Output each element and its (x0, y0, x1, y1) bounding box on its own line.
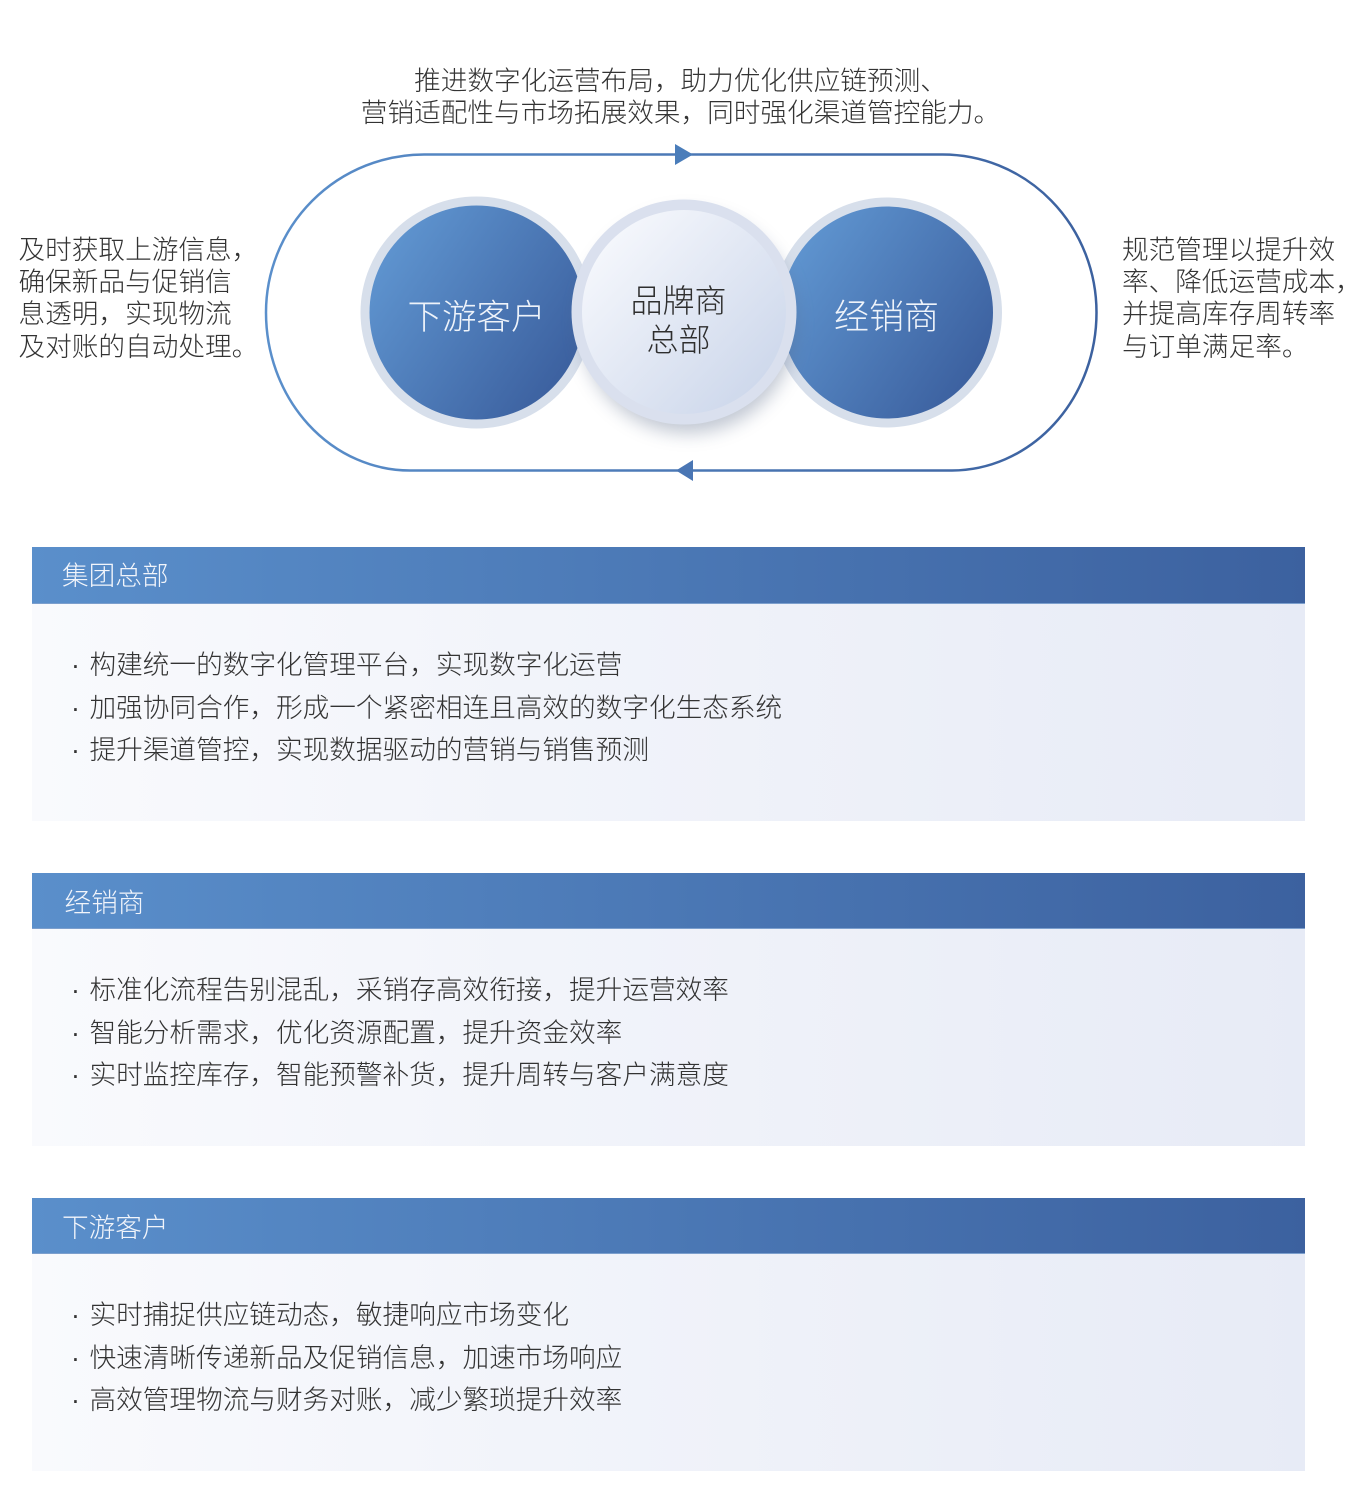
circle: downstream customers (360, 196, 592, 428)
list: group headquarters points: 提升渠道管控，实现数据驱动的营销与销售预测 (90, 735, 649, 765)
list: group headquarters points: · (71, 735, 80, 765)
text: top description: 营销适配性与市场拓展效果，同时强化渠道管控能力。 (361, 98, 1000, 128)
text: left description: 及对账的自动处理。 (18, 332, 258, 362)
list: group headquarters points (71, 650, 782, 765)
list: customer points: · (71, 1343, 80, 1373)
list: customer points: · (71, 1385, 80, 1415)
list: customer points: 快速清晰传递新品及促销信息，加速市场响应 (90, 1343, 622, 1373)
panel: group headquarters (32, 547, 1305, 821)
list: dealer points: · (71, 975, 80, 1005)
circle: dealers (772, 198, 1002, 428)
arrow: top (675, 144, 693, 165)
heading: group headquarters (32, 547, 1305, 604)
arrow: bottom (676, 460, 693, 481)
diagram: brand, dealer and customer loop (264, 144, 1098, 481)
text: right description: 率、降低运营成本， (1122, 267, 1362, 297)
text: right description: 并提高库存周转率 (1122, 299, 1335, 329)
text: right description (1122, 235, 1362, 362)
text: right description: 与订单满足率。 (1122, 332, 1308, 362)
text: top description (361, 66, 1000, 128)
text: left description: 及时获取上游信息， (18, 235, 258, 265)
list: customer points: 实时捕捉供应链动态，敏捷响应市场变化 (90, 1300, 569, 1330)
circle: dealers: 经销商 (834, 298, 939, 337)
text: left description: 息透明，实现物流 (18, 299, 232, 329)
list: dealer points: 标准化流程告别混乱，采销存高效衔接，提升运营效率 (90, 975, 729, 1005)
heading: downstream customers: 下游客户 (62, 1213, 169, 1243)
panel: dealers (32, 873, 1305, 1146)
text: top description: 推进数字化运营布局，助力优化供应链预测、 (414, 66, 947, 96)
list: dealer points: 实时监控库存，智能预警补货，提升周转与客户满意度 (90, 1060, 729, 1090)
text: right description: 规范管理以提升效 (1122, 235, 1335, 265)
circle: brand headquarters: 品牌商 (630, 283, 727, 319)
list: dealer points: 智能分析需求，优化资源配置，提升资金效率 (90, 1018, 622, 1048)
list: dealer points: · (71, 1060, 80, 1090)
heading: downstream customers (32, 1198, 1305, 1254)
list: group headquarters points: 加强协同合作，形成一个紧密相连且高效的数字化生态系统 (90, 693, 782, 723)
heading: group headquarters: 集团总部 (62, 561, 169, 591)
text: left description (18, 235, 258, 362)
heading: dealers: 经销商 (64, 888, 144, 918)
list: dealer points: · (71, 1018, 80, 1048)
list: customer points: 高效管理物流与财务对账，减少繁琐提升效率 (90, 1385, 622, 1415)
circle: brand headquarters: 总部 (646, 322, 711, 358)
list: group headquarters points: · (71, 693, 80, 723)
list: customer points: · (71, 1300, 80, 1330)
circle: downstream customers: 下游客户 (408, 299, 546, 337)
list: dealer points (71, 975, 729, 1090)
circle: brand headquarters (572, 200, 796, 433)
heading: dealers (32, 873, 1305, 929)
list: customer points (71, 1300, 622, 1415)
loop outline (266, 154, 1096, 471)
text: left description: 确保新品与促销信 (18, 267, 232, 297)
panel: downstream customers (32, 1198, 1305, 1471)
list: group headquarters points: · (71, 650, 80, 680)
list: group headquarters points: 构建统一的数字化管理平台，实现数字化运营 (90, 650, 622, 680)
